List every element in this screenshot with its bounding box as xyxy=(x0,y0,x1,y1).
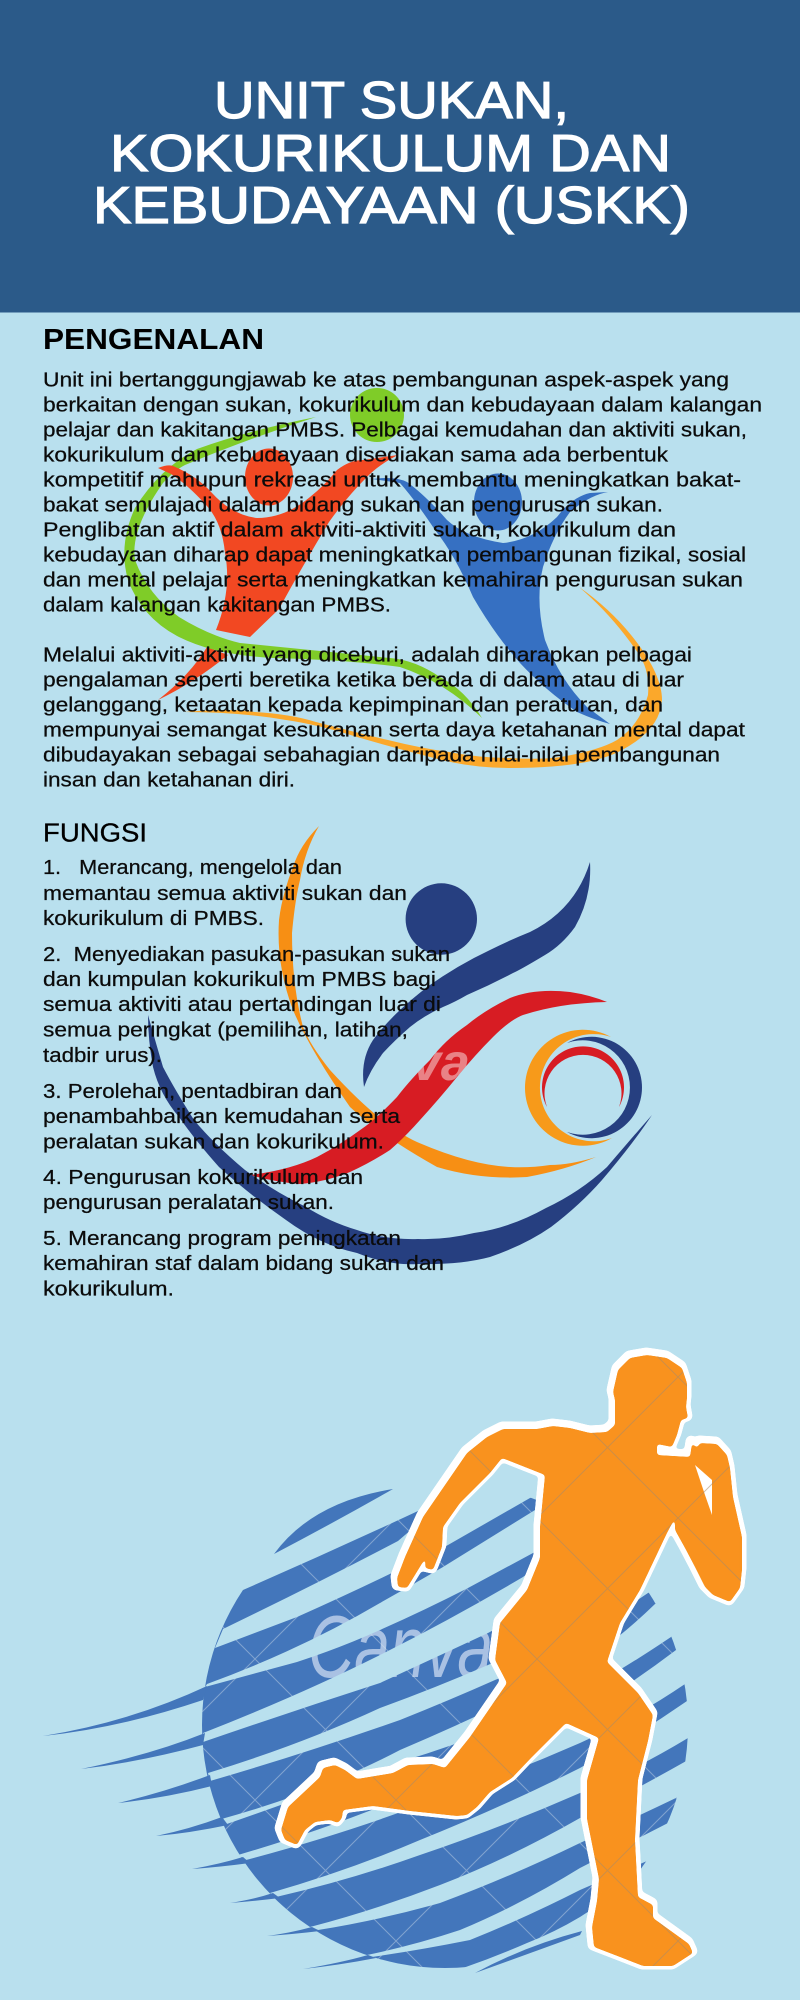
function 2: semua peringkat (pemilihan, latihan, xyxy=(43,1020,408,1042)
illustration: abstract sports logo behind functions xyxy=(148,826,652,1264)
function 1: 1. Merancang, mengelola dan xyxy=(43,857,342,879)
title xyxy=(93,72,690,235)
navy lower swoosh xyxy=(148,1015,652,1264)
blue figure head xyxy=(474,474,522,530)
function 5: kokurikulum. xyxy=(43,1278,174,1300)
green ribbon xyxy=(124,417,482,718)
orange swoosh xyxy=(279,826,596,1178)
text block: introduction paragraph 1: kokurikulum dan kebudayaan disediakan sama ada berbentuk xyxy=(43,444,669,466)
text block: introduction paragraph 1: Unit ini bertanggungjawab ke atas pembangunan aspek-aspek yang xyxy=(43,370,729,392)
function 2: tadbir urus). xyxy=(43,1045,162,1067)
function 4: 4. Pengurusan kokurikulum dan xyxy=(43,1167,363,1189)
watermark on red swoosh: va xyxy=(412,1034,470,1092)
text block: introduction paragraph 2: dibudayakan sebagai sebahagian daripada nilai-nilai pembangunan xyxy=(43,744,720,766)
text block: introduction paragraph 1: dalam kalangan kakitangan PMBS. xyxy=(43,594,391,616)
function 4: pengurusan peralatan sukan. xyxy=(43,1192,334,1214)
text block: introduction paragraph 2: gelanggang, ketaatan kepada kepimpinan dan peraturan, dan xyxy=(43,694,663,716)
runner silhouette xyxy=(280,1340,760,1980)
striped disc xyxy=(43,1470,705,1990)
navy body swoosh xyxy=(363,862,590,1087)
function 1: kokurikulum di PMBS. xyxy=(43,908,264,930)
red figure leg shard xyxy=(158,647,228,700)
text block: introduction paragraph 2: pengalaman seperti beretika ketika berada di dalam atau di luar xyxy=(43,670,684,692)
text block: introduction paragraph 2: insan dan ketahanan diri. xyxy=(43,770,295,792)
function 3: penambahbaikan kemudahan serta xyxy=(43,1106,401,1128)
text block: introduction paragraph 1: Penglibatan aktif dalam aktiviti-aktiviti sukan, kokurikulum dan xyxy=(43,520,676,542)
red figure body xyxy=(158,455,398,637)
text block: introduction paragraph 1: kompetitif mahupun rekreasi untuk membantu meningkatkan bakat- xyxy=(43,470,741,492)
function 3: 3. Perolehan, pentadbiran dan xyxy=(43,1081,342,1103)
ring ball xyxy=(525,1030,642,1146)
red swoosh xyxy=(250,991,607,1184)
function 2: semua aktiviti atau pertandingan luar di xyxy=(43,994,441,1016)
function 5 xyxy=(43,1228,444,1300)
function 4 xyxy=(43,1167,363,1214)
heading: Fungsi: FUNGSI xyxy=(43,818,147,848)
navy head xyxy=(406,883,477,955)
text block: introduction paragraph 2: mempunyai semangat kesukanan serta daya ketahanan mental dapat xyxy=(43,720,745,742)
list: functions xyxy=(43,857,450,1300)
text block: introduction paragraph 1 xyxy=(43,370,762,616)
title: KOKURIKULUM DAN xyxy=(110,125,671,183)
illustration: people with ribbons behind introduction xyxy=(124,388,662,768)
header band xyxy=(0,0,800,312)
text block: introduction paragraph 1: berkaitan dengan sukan, kokurikulum dan kebudayaan dalam kalangan xyxy=(43,394,762,416)
function 2: dan kumpulan kokurikulum PMBS bagi xyxy=(43,969,436,991)
heading: Pengenalan: PENGENALAN xyxy=(43,324,264,356)
function 2 xyxy=(43,944,450,1067)
illustration: runner over striped disc xyxy=(43,1340,760,1990)
text block: introduction paragraph 2: Melalui aktiviti-aktiviti yang diceburi, adalah diharapkan pelbagai xyxy=(43,644,692,666)
function 2: 2. Menyediakan pasukan-pasukan sukan xyxy=(43,944,450,966)
function 5: 5. Merancang program peningkatan xyxy=(43,1228,401,1250)
text block: introduction paragraph 1: bakat semulajadi dalam bidang sukan dan pengurusan sukan. xyxy=(43,494,663,516)
function 3 xyxy=(43,1081,401,1154)
function 1: memantau semua aktiviti sukan dan xyxy=(43,883,407,905)
text block: introduction paragraph 2 xyxy=(43,644,745,792)
red figure head xyxy=(245,448,293,506)
text block: introduction paragraph 1: pelajar dan kakitangan PMBS. Pelbagai kemudahan dan aktiviti sukan, xyxy=(43,420,747,442)
orange ribbon xyxy=(184,587,662,768)
function 3: peralatan sukan dan kokurikulum. xyxy=(43,1132,384,1154)
function 1 xyxy=(43,857,407,930)
title: UNIT SUKAN, xyxy=(214,72,569,130)
function 5: kemahiran staf dalam bidang sukan dan xyxy=(43,1253,444,1275)
title: KEBUDAYAAN (USKK) xyxy=(93,177,690,235)
text block: introduction paragraph 1: dan mental pelajar serta meningkatkan kemahiran pengurusan sukan xyxy=(43,570,743,592)
text block: introduction paragraph 1: kebudayaan diharap dapat meningkatkan pembangunan fizikal, sosial xyxy=(43,544,746,566)
green ball xyxy=(350,388,404,442)
blue figure body xyxy=(372,478,610,724)
striped disc: Canva xyxy=(308,1597,493,1696)
